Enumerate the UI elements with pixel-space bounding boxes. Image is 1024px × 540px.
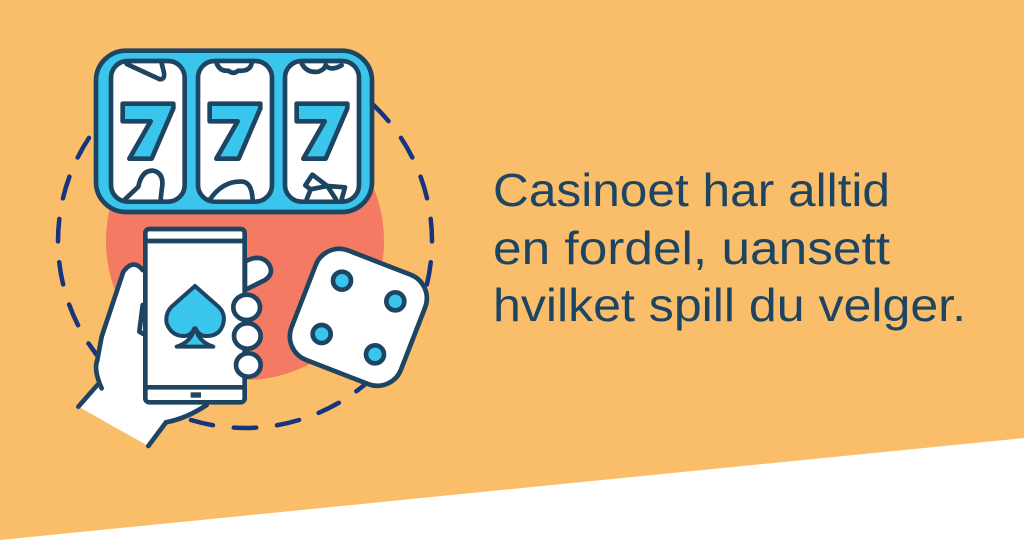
finger two (234, 323, 261, 349)
icon: spade (166, 286, 224, 347)
dashed circle (58, 54, 432, 428)
dice pip three (313, 325, 331, 343)
text line two: en fordel, uansett (493, 222, 890, 274)
text block (493, 164, 966, 331)
dice pip two (386, 292, 404, 310)
dice pip one (333, 272, 351, 290)
phone top bar (145, 234, 245, 248)
hand outline (78, 265, 207, 446)
icon: dice (282, 241, 434, 393)
finger three (236, 353, 261, 377)
dice body (282, 241, 434, 393)
reel three (285, 61, 359, 202)
phone body (145, 229, 245, 402)
icon: slot machine (96, 51, 372, 212)
reel two (198, 61, 272, 202)
reel one (111, 61, 185, 202)
dice pip four (366, 345, 384, 363)
phone bottom bar (145, 380, 245, 394)
finger one (233, 295, 260, 320)
index finger (245, 258, 271, 290)
hand palm and thumb (78, 265, 207, 446)
machine frame (96, 51, 372, 212)
icon: hand holding phone (78, 229, 271, 446)
red background circle (106, 102, 384, 380)
text line one: Casinoet har alltid (493, 164, 890, 216)
text line three: hvilket spill du velger. (493, 279, 966, 331)
phone button (191, 392, 201, 398)
